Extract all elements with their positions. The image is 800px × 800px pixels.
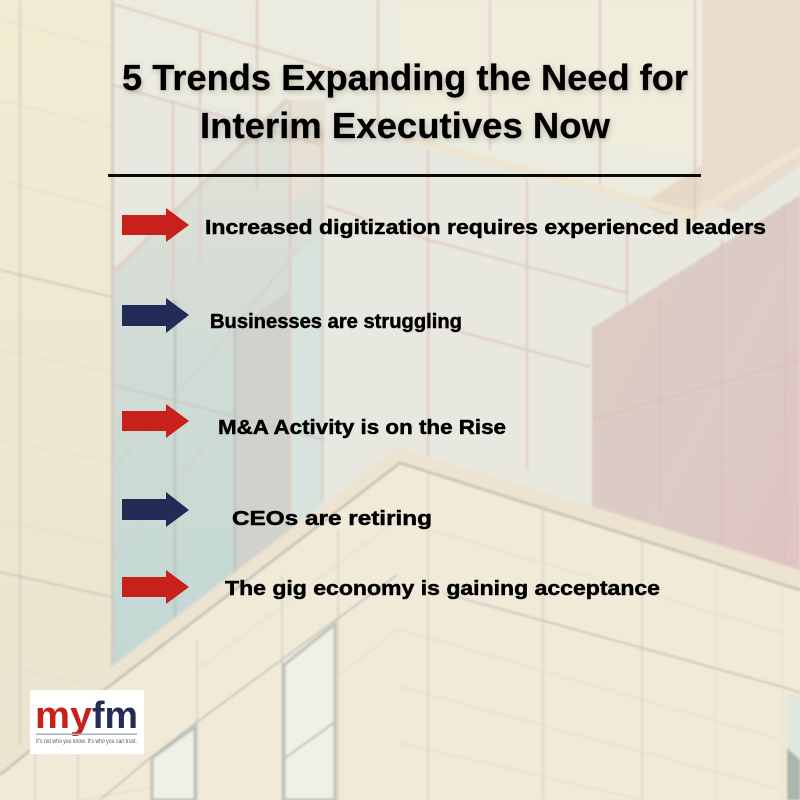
text: trend 4: CEOs are retiring	[232, 507, 432, 530]
logo: myfm: fm	[92, 695, 138, 737]
icon: navy arrow	[122, 492, 189, 527]
text: trend 5: The gig economy is gaining acceptance	[225, 577, 660, 600]
trend 2: arrow and text	[122, 298, 462, 333]
logo: myfm	[30, 690, 144, 754]
icon: navy arrow	[122, 298, 189, 333]
title: Interim Executives Now	[200, 105, 611, 146]
icon: red arrow	[122, 208, 189, 242]
trend 4: arrow and text	[122, 492, 432, 530]
logo: myfm: my	[35, 695, 92, 737]
icon: red arrow	[122, 404, 189, 438]
background: lower building	[0, 447, 800, 800]
title: 5 Trends Expanding the Need for	[122, 57, 688, 98]
trend 3: arrow and text	[122, 404, 506, 439]
logo: myfm: It's not who you know. It's who you can trust.	[36, 739, 137, 745]
trend 1: arrow and text	[122, 208, 766, 242]
title	[122, 57, 688, 146]
text: trend 1: Increased digitization requires experienced leaders	[205, 216, 766, 239]
background: pink window grid	[100, 0, 800, 670]
text: trend 2: Businesses are struggling	[210, 310, 462, 333]
divider line under title	[108, 174, 701, 177]
background: cream diagonal beams	[113, 100, 800, 273]
text: trend 3: M&A Activity is on the Rise	[218, 416, 506, 439]
trend 5: arrow and text	[122, 570, 660, 604]
icon: red arrow	[122, 570, 189, 604]
background: left wall	[0, 0, 112, 800]
